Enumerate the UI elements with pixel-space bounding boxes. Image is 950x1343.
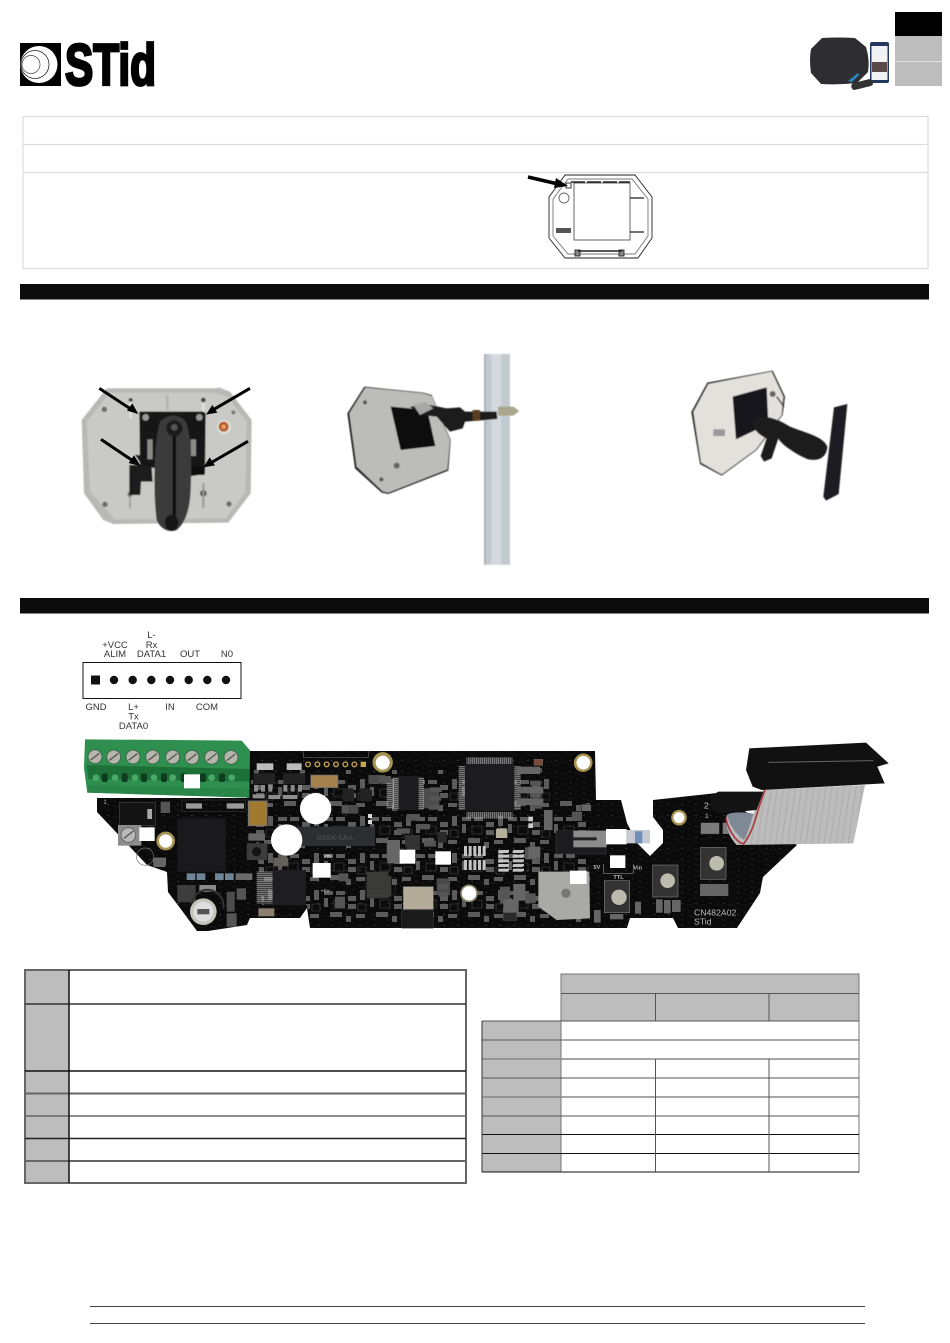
terminal block (84, 739, 250, 798)
right section of board: CN482A02 (694, 908, 737, 918)
number tag 5 (435, 851, 451, 865)
terminal labels: top row: Rx (146, 640, 158, 651)
table: cable specifications (482, 974, 859, 1172)
number tag 2 (139, 827, 155, 841)
terminal labels: top row (102, 630, 233, 660)
right section of board (497, 743, 889, 927)
arrows: four fixing screws (99, 388, 250, 467)
right section of board: 2 (704, 800, 709, 810)
right section of board: 1 (705, 813, 709, 820)
terminal labels: bottom row (85, 702, 218, 732)
terminal labels: bottom row: GND (85, 702, 107, 713)
terminal labels: top row: DATA1 (137, 649, 166, 660)
number tag 3 (313, 863, 331, 878)
board outline (97, 751, 797, 931)
number tag 4 (400, 850, 415, 864)
terminal labels: top row: L- (147, 630, 156, 641)
number tag 1 (184, 774, 200, 788)
ribbon connector block (710, 792, 763, 813)
buzzer (538, 872, 590, 920)
right section of board: TTL (613, 875, 624, 881)
number tag 7 (610, 855, 625, 868)
terminal labels: bottom row: L+ (128, 702, 139, 713)
silkscreen and small components (250, 770, 590, 925)
left section of board: 1 (103, 800, 107, 806)
right section of board: STid (694, 917, 712, 927)
number tag 8 (570, 871, 587, 884)
terminal labels: top row: OUT (180, 649, 200, 660)
terminal labels: bottom row: Tx (128, 712, 139, 722)
photo: reader on wall bracket arm (691, 371, 847, 501)
ribbon cable (726, 785, 865, 845)
header row (306, 762, 357, 767)
section bar: mounting (20, 284, 929, 300)
arrow: fixing point on reader back (528, 177, 568, 188)
terminal labels: top row: +VCC (102, 640, 128, 651)
language tabs (895, 12, 942, 86)
footer rules (90, 1306, 865, 1324)
panel: product information box (23, 116, 928, 268)
photo: electronic board (84, 739, 889, 931)
power section components (119, 802, 155, 826)
left section of board: +5V (321, 889, 330, 895)
terminal labels: top row: N0 (221, 649, 233, 660)
logo: STid: STid (65, 33, 156, 98)
relay (298, 827, 375, 846)
central section of board (337, 754, 590, 920)
terminal labels: top row: ALIM (104, 649, 126, 660)
diagram: reader back outline (549, 175, 652, 258)
number tag 6 (606, 829, 627, 844)
terminal labels: bottom row: DATA0 (119, 721, 148, 732)
terminal labels: bottom row: COM (196, 702, 218, 713)
photo: bracket fitted on reader back (82, 388, 252, 531)
terminal labels: bottom row: IN (165, 702, 175, 713)
icon: reader with smartphone and badge (810, 38, 889, 91)
left section of board: G6SK-1A-L (317, 833, 354, 842)
diagram: eight-pin terminal block (83, 662, 241, 698)
logo: STid (20, 33, 156, 98)
push buttons (604, 847, 726, 913)
left section of board (84, 739, 450, 928)
table: component legend (25, 970, 466, 1183)
usb connector (556, 831, 606, 854)
mounting holes and openings (300, 793, 331, 824)
right section of board: 5V (593, 865, 600, 871)
section bar: wiring (20, 598, 929, 614)
photo: reader mounted on a pole (347, 354, 519, 565)
right section of board: Vin (633, 866, 643, 872)
left section of board: VIN (323, 853, 332, 859)
central openings (374, 754, 391, 771)
